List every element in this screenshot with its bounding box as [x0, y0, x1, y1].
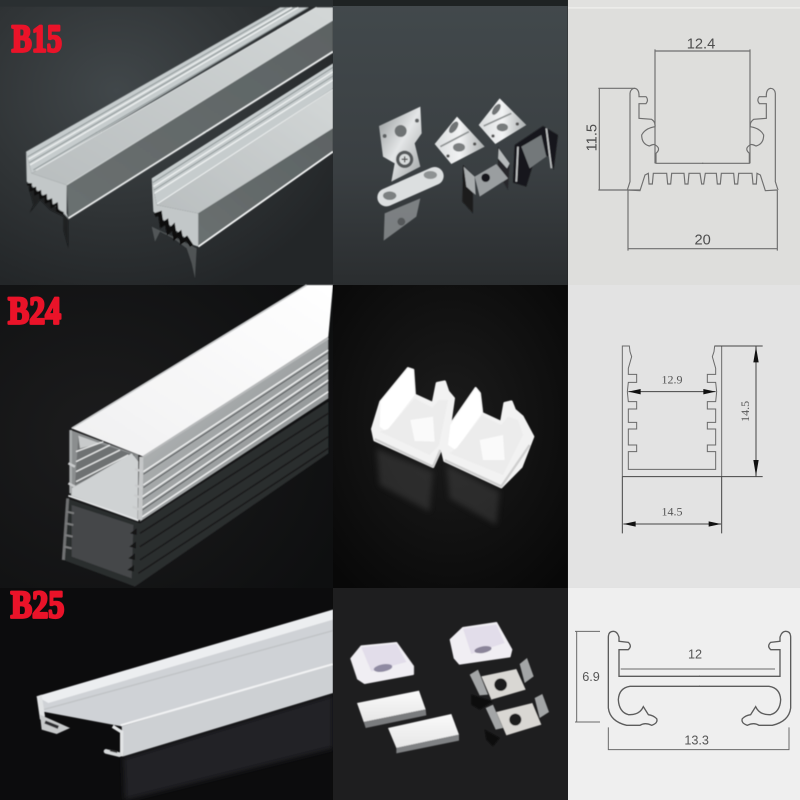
- dimension lines: [575, 631, 789, 750]
- panel: B25 profile photo: [0, 584, 333, 800]
- part: end cap left: [372, 368, 454, 467]
- dimension: 14.5 height: 14.5: [738, 401, 752, 422]
- dimension: 12.9: 12.9: [662, 372, 682, 386]
- profile: B24 channel: [68, 285, 333, 522]
- part: end cap left: [351, 643, 413, 683]
- part: triangular bracket left: [435, 117, 485, 164]
- label: B24: B24: [8, 290, 61, 332]
- part: mounting clip lower: [485, 694, 549, 746]
- dimension: 12: 12: [688, 647, 702, 661]
- dimension: 20: 20: [695, 232, 711, 248]
- part: adhesive tile lower: [388, 714, 459, 753]
- part: mounting clip upper: [470, 658, 534, 710]
- dimension: 11.5: 11.5: [584, 124, 600, 151]
- panel: B15 cross-section drawing: [568, 0, 800, 285]
- panel: B15 profile photo: [0, 0, 333, 285]
- profile: small B15 channel: [152, 63, 333, 278]
- part: metal clip standing: [513, 126, 558, 187]
- arrowheads: [623, 347, 759, 527]
- panel: B25 accessories photo: [333, 588, 568, 800]
- dimension: 12.4: 12.4: [687, 37, 715, 53]
- part: end cap right: [451, 623, 511, 664]
- profile: B25 channel: [37, 610, 333, 756]
- part: swivel bracket: [379, 107, 437, 241]
- part: adhesive tile upper: [357, 691, 426, 728]
- dimension: 6.9: 6.9: [582, 670, 600, 684]
- profile reflection: [63, 402, 328, 587]
- dimension lines: [622, 346, 763, 533]
- panel: B24 white end caps photo: [333, 285, 568, 588]
- panel: B25 cross-section drawing: [568, 588, 800, 800]
- profile outline: [627, 88, 778, 191]
- part: metal clip lying: [462, 147, 510, 213]
- panel: B24 cross-section drawing: [568, 285, 800, 588]
- label: B25: B25: [11, 584, 64, 626]
- dimension lines: [598, 49, 777, 251]
- profile outline: [622, 346, 722, 477]
- dimension: 13.3: 13.3: [684, 733, 709, 747]
- panel: B24 profile photo: [0, 285, 333, 588]
- part: end cap right: [442, 388, 533, 487]
- dimension: 14.5 width: 14.5: [662, 505, 682, 519]
- profile outline: [608, 631, 791, 725]
- part: triangular bracket right: [479, 98, 526, 144]
- label: B15: B15: [12, 19, 62, 61]
- profile: large B15 channel: [26, 7, 333, 248]
- panel: B15 mounting brackets photo: [333, 0, 568, 285]
